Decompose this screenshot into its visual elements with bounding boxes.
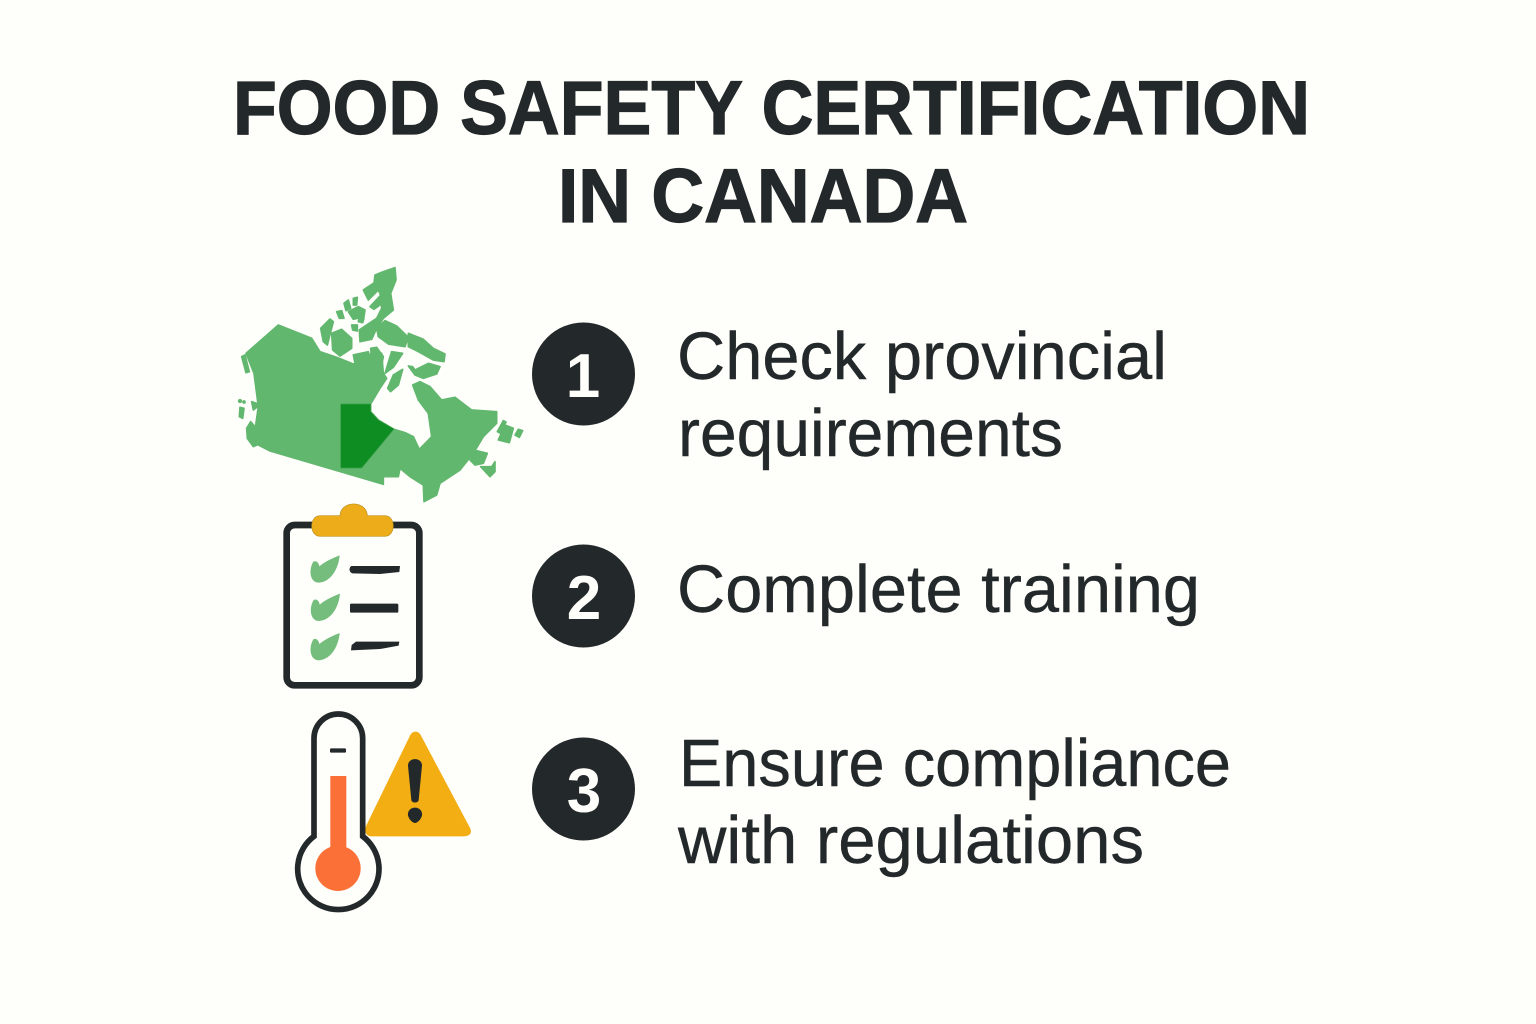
highlighted province: [341, 404, 394, 468]
step 1 text: [677, 319, 1167, 471]
title: FOOD SAFETY CERTIFICATION: [233, 66, 1310, 151]
icon: warning triangle: [365, 732, 471, 836]
step 3 text: [677, 726, 1231, 878]
step 1 badge: [532, 322, 635, 426]
step 1 text: Check provincial: [677, 319, 1167, 394]
step 1 badge: 1: [566, 342, 600, 411]
step 3 badge: 3: [567, 757, 601, 826]
title: IN CANADA: [558, 154, 968, 239]
step 2 badge: 2: [567, 564, 601, 633]
checklist lines: [350, 566, 400, 650]
step 2 badge: [532, 544, 635, 648]
step 2 text: Complete training: [677, 552, 1200, 627]
icon: map of Canada with highlighted province: [239, 268, 523, 502]
title: [233, 66, 1310, 239]
checklist marks: [311, 555, 340, 660]
step 3 text: with regulations: [677, 803, 1144, 878]
icon: thermometer: [298, 714, 379, 910]
step 3 text: Ensure compliance: [679, 726, 1231, 801]
step 1 text: requirements: [678, 396, 1063, 471]
icon: clipboard checklist: [287, 504, 419, 685]
clipboard clip: [312, 504, 393, 536]
step 3 badge: [532, 738, 635, 840]
